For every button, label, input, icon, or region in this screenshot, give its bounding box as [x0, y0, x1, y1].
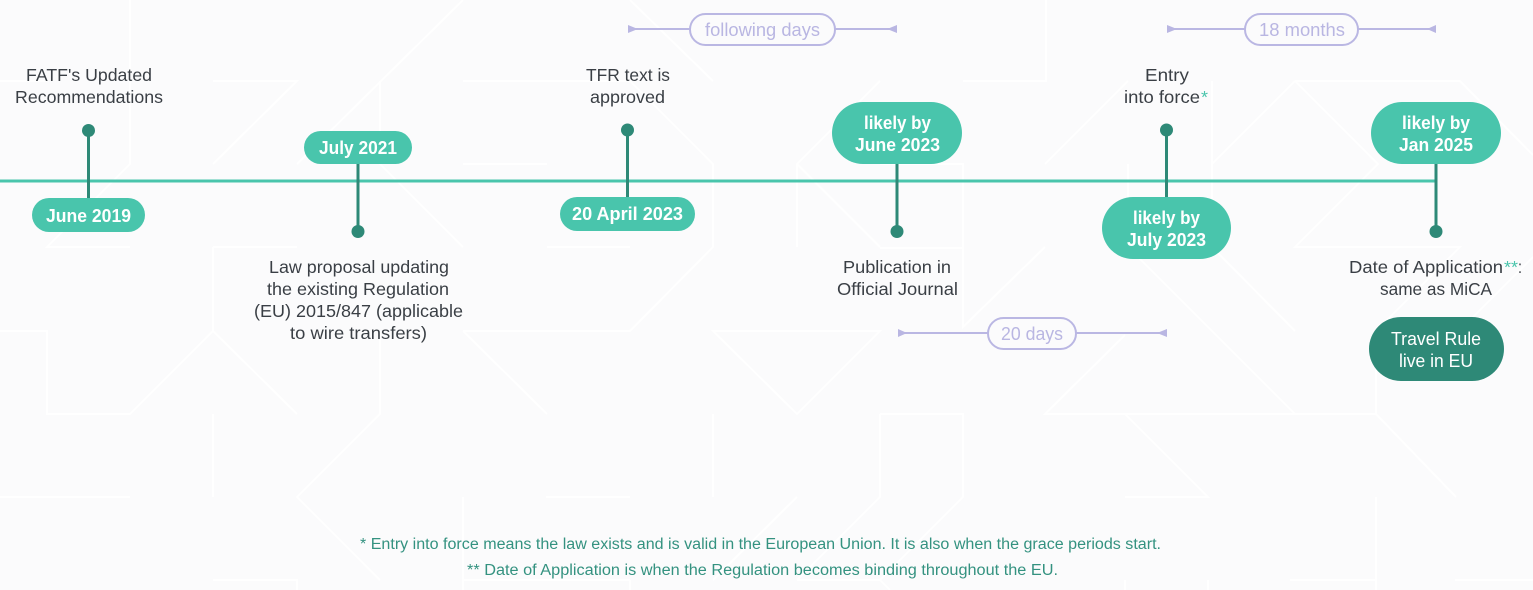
bracket: 20 days: 20 days: [1001, 324, 1063, 344]
milestone: Entry into force, July 2023: [1102, 65, 1231, 259]
label: Date of Application same as MiCA: **: [1504, 257, 1518, 277]
label: law proposal: the existing Regulation: [267, 279, 449, 299]
label: law proposal: Law proposal updating: [269, 257, 449, 277]
outcome pill: Travel Rule live in EU: live in EU: [1399, 351, 1473, 371]
milestone: FATF's Updated Recommendations, June 2019: [15, 65, 163, 232]
milestone: Date of Application, Jan 2025: [1349, 102, 1522, 381]
outcome pill: Travel Rule live in EU: Travel Rule: [1391, 329, 1481, 349]
date pill: 20 April 2023: 20 April 2023: [572, 204, 683, 224]
label: Date of Application same as MiCA: same as MiCA: [1380, 279, 1492, 299]
main timeline axis: [0, 180, 1436, 182]
date pill: likely by Jan 2025: Jan 2025: [1399, 135, 1473, 155]
date pill: July 2021: July 2021: [319, 138, 397, 158]
date pill: likely by Jan 2025: [1371, 102, 1501, 164]
date pill: 20 April 2023: [560, 197, 695, 231]
footnotes: [360, 536, 1161, 579]
label: Entry into force: Entry: [1145, 65, 1189, 85]
milestone: TFR text approved, 20 April 2023: [560, 65, 695, 231]
footnotes: ** Date of Application is when the Regulation becomes binding throughout the EU.: [467, 562, 1058, 579]
label: Date of Application same as MiCA: :: [1518, 257, 1522, 277]
label: FATF's Updated Recommendations: FATF's Updated: [26, 65, 152, 85]
date pill: likely by July 2023: [1102, 197, 1231, 259]
bracket: 18 months: [1167, 14, 1436, 45]
label: TFR text is approved: TFR text is: [586, 65, 670, 85]
date pill: likely by June 2023: [832, 102, 962, 164]
marker stem and dot: [352, 162, 364, 238]
label: Date of Application same as MiCA: Date of Application: [1349, 257, 1503, 277]
marker stem and dot: [621, 124, 634, 199]
label: TFR text is approved: [586, 65, 670, 107]
bracket: following days: following days: [705, 20, 820, 40]
marker stem and dot: [890, 162, 904, 238]
label: Date of Application same as MiCA: [1349, 257, 1522, 299]
label: Entry into force: [1124, 65, 1208, 107]
date pill: June 2019: June 2019: [46, 206, 131, 226]
label: FATF's Updated Recommendations: Recommendations: [15, 87, 163, 107]
bracket: 18 months: 18 months: [1259, 20, 1345, 40]
label: Publication in Official Journal: Official Journal: [837, 279, 958, 299]
date pill: July 2021: [304, 131, 412, 164]
outcome pill: Travel Rule live in EU: [1369, 317, 1504, 381]
milestone: Law proposal, July 2021: [254, 131, 463, 343]
bracket: 20 days: [898, 318, 1167, 349]
label: law proposal: [254, 257, 463, 343]
date pill: June 2019: [32, 198, 145, 232]
label: Entry into force: into force: [1124, 87, 1200, 107]
label: law proposal: (EU) 2015/847 (applicable: [254, 301, 463, 321]
date pill: likely by June 2023: June 2023: [855, 135, 940, 155]
date pill: likely by June 2023: likely by: [864, 113, 931, 133]
date pill: likely by July 2023: July 2023: [1127, 230, 1206, 250]
label: Entry into force: *: [1201, 87, 1208, 107]
label: Publication in Official Journal: Publication in: [843, 257, 951, 277]
milestone: Publication in Official Journal, June 2023: [832, 102, 962, 299]
label: law proposal: to wire transfers): [290, 323, 427, 343]
label: Publication in Official Journal: [837, 257, 958, 299]
marker stem and dot: [1160, 124, 1173, 199]
marker stem and dot: [82, 124, 95, 200]
date pill: likely by Jan 2025: likely by: [1402, 113, 1470, 133]
bracket: following days: [628, 14, 897, 45]
label: TFR text is approved: approved: [590, 87, 665, 107]
marker stem and dot: [1430, 162, 1442, 238]
label: FATF's Updated Recommendations: [15, 65, 163, 107]
footnotes: * Entry into force means the law exists and is valid in the European Union. It is also when the grace periods start.: [360, 536, 1161, 553]
date pill: likely by July 2023: likely by: [1133, 208, 1200, 228]
